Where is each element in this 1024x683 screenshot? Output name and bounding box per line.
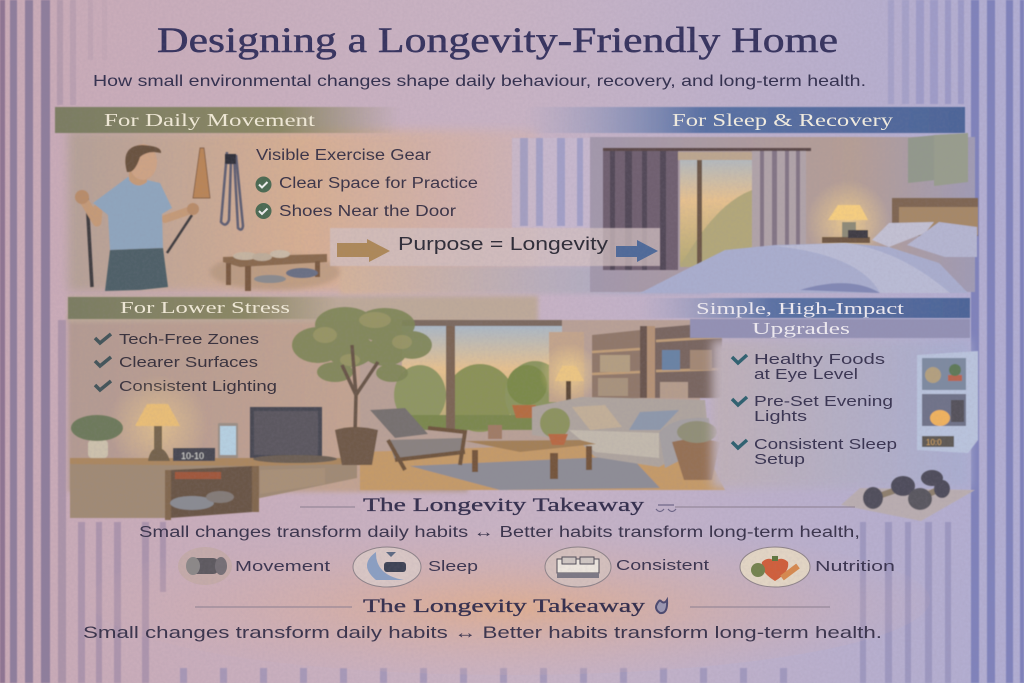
list: upgrades: Pre-Set Evening [754,393,893,410]
warm bottom wash [90,525,930,675]
icon: check [256,203,272,219]
panel background [712,340,970,488]
blue stripes [512,138,590,228]
window [394,320,584,432]
list: upgrades: Consistent Sleep [754,436,897,453]
arrow: right [616,240,658,262]
illustration: man with resistance bands [75,144,199,291]
floor [360,440,725,490]
takeaway lower: Small changes transform daily habits ↔ Better habits transform long-term health. [83,624,882,642]
pot plant by window [507,365,547,418]
heading band: upgrades: Simple, High-Impact [696,299,904,318]
takeaway upper: Small changes transform daily habits ↔ Better habits transform long-term health, [139,524,860,541]
armchair [370,408,465,470]
plant [71,415,123,458]
takeaway lower [83,597,882,642]
tablet [218,423,238,458]
list: upgrades [732,351,897,468]
illustration: curtains and window [603,148,811,270]
panel: for lower stress [68,296,538,520]
icon: swirl [656,600,667,613]
list: daily movement: Clear Space for Practice [279,175,478,192]
left edge stripes [0,0,107,683]
heading band: for daily movement [55,107,400,133]
room background [360,320,700,490]
icon: consistent: Consistent [616,557,710,574]
illustration: smart fridge [917,351,978,453]
illustration: bed [640,198,978,293]
illustration: dumbbells on mat [841,470,975,521]
list: daily movement [256,147,478,220]
band under bedroom and purpose [340,266,710,294]
monitor [250,407,337,463]
illustration: bedside lamp [806,180,890,264]
list: daily movement: Visible Exercise Gear [256,147,431,164]
list: lower stress: Tech-Free Zones [119,331,259,348]
panel: purpose equals longevity: Purpose = Longevity [398,233,609,254]
illustration: hanging straps [193,148,243,230]
takeaway lower: The Longevity Takeaway [363,597,646,617]
subtitle: How small environmental changes shape daily behaviour, recovery, and long-term health. [93,73,866,90]
sofa [532,397,712,468]
bookshelves [592,322,722,402]
heading band: upgrades: Upgrades [752,319,850,338]
icon: movement [178,547,331,585]
list: upgrades: Healthy Foods [754,351,885,368]
panel: for sleep and recovery [512,107,978,293]
illustration: smart fridge: 10:0 [926,438,942,447]
icon: sleep [353,547,478,587]
heading band: for sleep and recovery [525,107,965,133]
tree [292,307,432,465]
list: daily movement: Shoes Near the Door [279,203,456,220]
panel: for daily movement [55,107,710,294]
illustration: shoe bench [210,250,340,291]
heading band: for lower stress: For Lower Stress [120,298,290,317]
bottom stripes [78,522,951,683]
floor lamp [539,343,599,403]
icon row [178,547,895,587]
list: lower stress: Consistent Lighting [119,378,277,395]
illustration: living room [292,307,725,490]
icon: movement: Movement [235,558,331,575]
clock [173,448,215,461]
list: lower stress: Clearer Surfaces [119,354,258,371]
list: upgrades: at Eye Level [754,366,858,383]
takeaway upper [139,496,860,541]
illustration: wall pictures [908,133,968,186]
heading band: for sleep and recovery: For Sleep & Recovery [672,110,893,130]
arrow: left [337,239,390,262]
panel: simple high-impact upgrades [640,298,978,521]
icon: scales [656,505,676,512]
icon: nutrition: Nutrition [815,558,895,575]
lamp [135,404,180,461]
rug [410,456,660,490]
icon: nutrition [740,547,895,587]
woven basket [672,421,720,480]
clock: 10-10 [181,451,204,461]
list: upgrades: Setup [754,451,805,468]
heading band: for lower stress [68,297,338,319]
icon: sleep: Sleep [428,558,478,575]
panel background [68,130,538,292]
icon: consistent [545,547,710,587]
icon: check [256,176,272,192]
heading band: for daily movement: For Daily Movement [104,110,315,130]
list: upgrades: Lights [754,408,807,425]
title: Designing a Longevity-Friendly Home [157,20,838,60]
bedroom wall [590,137,975,292]
list: lower stress [95,331,277,395]
illustration: desk scene [70,375,357,520]
takeaway upper: The Longevity Takeaway [363,496,645,516]
coffee table [465,408,596,479]
heading band: upgrades [640,298,970,338]
panel background [68,315,468,492]
panel: purpose equals longevity [330,228,660,266]
right edge stripes [888,0,1024,683]
